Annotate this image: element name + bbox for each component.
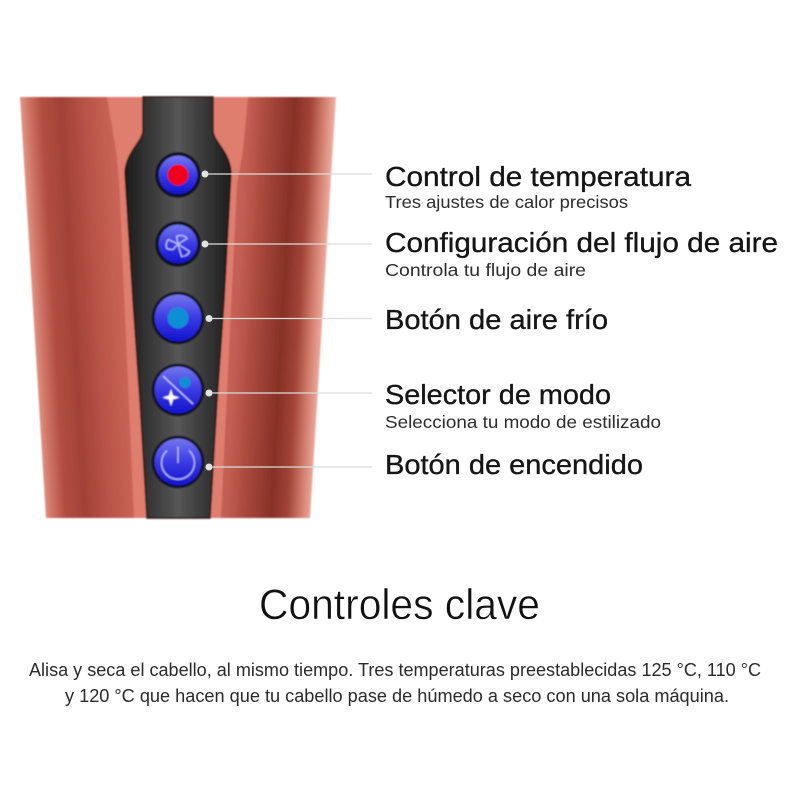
label: mode selector <box>385 379 661 432</box>
description <box>29 660 761 706</box>
icon: power <box>162 446 194 479</box>
icon: cold dot <box>180 377 190 388</box>
description: Alisa y seca el cabello, al mismo tiempo. Tres temperaturas preestablecidas 125 °C, 110 °C <box>29 660 761 680</box>
label: mode selector: Selecciona tu modo de estilizado <box>385 412 661 432</box>
left highlight strip <box>107 97 150 518</box>
label: mode selector: Selector de modo <box>385 379 611 410</box>
body shell right <box>178 97 336 518</box>
callout lines <box>202 170 372 470</box>
label: temperature control: Tres ajustes de calor precisos <box>385 192 628 212</box>
dark control panel <box>125 97 231 518</box>
icon: mode divider <box>163 376 193 404</box>
body shell left <box>20 97 178 518</box>
icon: sparkle <box>162 389 180 406</box>
button: mode selector <box>152 364 204 416</box>
right highlight strip <box>206 97 248 518</box>
icon: fan <box>166 235 190 256</box>
label: temperature control: Control de temperatura <box>385 161 691 192</box>
label: power button: Botón de encendido <box>385 449 643 480</box>
button: power <box>152 436 204 488</box>
button: temperature <box>156 152 200 198</box>
label: airflow setting <box>385 227 778 280</box>
label: temperature control <box>385 161 691 212</box>
label: cold air button: Botón de aire frío <box>385 304 608 335</box>
product: hair tool body <box>20 97 336 518</box>
label: airflow setting: Controla tu flujo de aire <box>385 260 586 280</box>
description: y 120 °C que hacen que tu cabello pase de húmedo a seco con una sola máquina. <box>65 686 729 706</box>
button: airflow <box>156 222 200 266</box>
button: cold air <box>152 292 204 344</box>
heading: Controles clave <box>259 581 540 629</box>
label: airflow setting: Configuración del flujo de aire <box>385 227 778 258</box>
